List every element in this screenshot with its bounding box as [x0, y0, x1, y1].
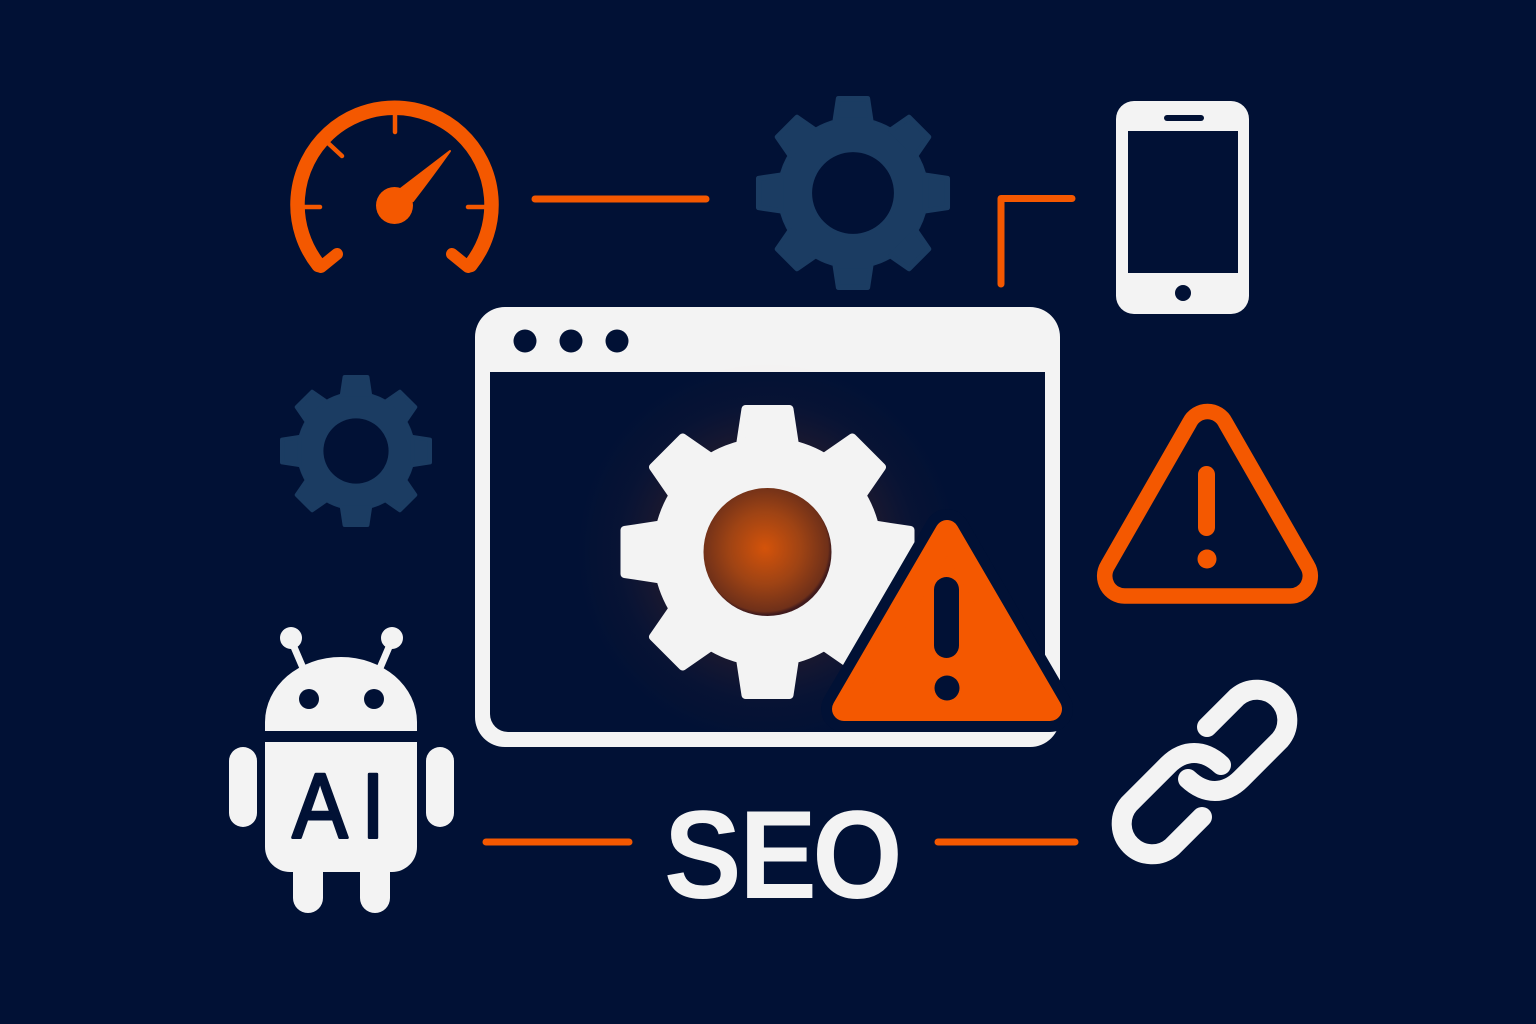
window control dots [514, 330, 628, 352]
connector line: SEO to link [938, 838, 1075, 846]
icon: central white gear [624, 409, 925, 695]
icon: smartphone [1116, 101, 1249, 314]
connector line: elbow to phone [1001, 198, 1072, 284]
icon: chain link [1122, 690, 1287, 854]
connector line: robot to SEO [486, 838, 629, 846]
icon: outlined warning triangle [1105, 412, 1310, 596]
icon: AI robot [229, 627, 454, 913]
icon: speedometer [297, 108, 491, 267]
panel: browser window [475, 307, 1060, 747]
gear glow [577, 362, 957, 742]
connector line: speedometer to gear [535, 196, 706, 202]
icon: small blue gear [282, 377, 430, 525]
icon: large blue gear [759, 99, 947, 287]
label: AI: AI [292, 754, 384, 857]
heading: SEO: SEO [664, 785, 903, 925]
icon: solid warning triangle [844, 532, 1050, 709]
